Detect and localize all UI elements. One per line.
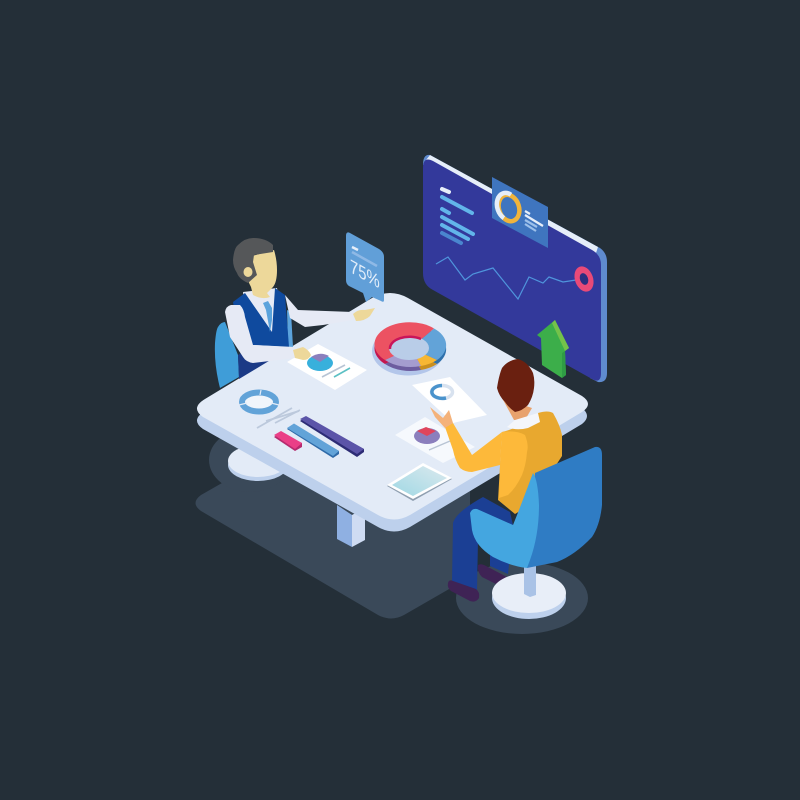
- far shoe: [478, 564, 507, 584]
- meeting table: [197, 293, 588, 532]
- right sleeve: [285, 295, 353, 327]
- tablet: [387, 463, 452, 501]
- left office chair: [215, 322, 239, 388]
- vest: [233, 288, 289, 347]
- screen face: [423, 160, 601, 381]
- left sleeve: [225, 305, 295, 363]
- screen frame edge: [423, 155, 607, 382]
- pie chart: [307, 355, 333, 371]
- table front leg: [337, 505, 365, 547]
- screen top highlight: [426, 155, 598, 253]
- donut hole: [389, 336, 429, 360]
- chart end marker ring: [571, 264, 597, 294]
- right hand: [353, 308, 375, 321]
- floor shadows: [196, 428, 588, 634]
- 75% callout bubble: [346, 232, 384, 302]
- hair: [233, 238, 273, 283]
- right man: [448, 497, 513, 602]
- yellow segment: [411, 348, 437, 366]
- table left pedestal base: [228, 445, 288, 481]
- right man torso: [430, 359, 562, 514]
- hair: [497, 359, 534, 412]
- screen line chart: [436, 257, 576, 299]
- shirt chest: [243, 288, 287, 352]
- screen text lines: [442, 189, 473, 243]
- orange shirt back: [498, 412, 562, 514]
- small donut: [432, 386, 452, 398]
- table bar: pink: [274, 431, 302, 451]
- ear: [244, 267, 252, 277]
- table bar: purple: [300, 416, 364, 457]
- vest trim: [287, 310, 293, 347]
- floating donut card: [492, 177, 548, 248]
- paper: left pie report: [287, 344, 367, 390]
- red segment: [374, 322, 434, 360]
- central donut chart: [372, 322, 446, 376]
- donut inner wall: [390, 337, 421, 349]
- tie: [263, 301, 272, 332]
- donut plate: [372, 326, 444, 376]
- light shirt panel: [499, 431, 528, 498]
- report lines: [322, 365, 345, 377]
- neck: [502, 398, 532, 420]
- collar: [507, 413, 540, 429]
- paper: pie report: [395, 417, 475, 463]
- chair back: [527, 447, 602, 568]
- left hand: [293, 347, 311, 360]
- report lines: [429, 441, 450, 450]
- table text lines: [257, 408, 300, 428]
- near shoe: [448, 580, 479, 602]
- blue segment: [411, 328, 446, 360]
- hand: [430, 407, 453, 428]
- paper: right donut report: [412, 377, 487, 423]
- neck and face: [247, 250, 277, 298]
- card donut: [493, 190, 523, 224]
- right office chair: [470, 447, 602, 568]
- table top: [197, 293, 588, 520]
- purple segment: [385, 348, 421, 367]
- 75% label: 75%: [350, 255, 380, 293]
- pie chart: [414, 428, 440, 444]
- right chair stem and base: [492, 566, 566, 619]
- bubble header lines: [352, 247, 358, 250]
- green up arrow: [537, 320, 569, 378]
- card lines: [525, 211, 543, 231]
- chair seat: [470, 473, 539, 568]
- near leg: [452, 497, 513, 590]
- table donut chart: [239, 390, 279, 412]
- lower vest: [238, 345, 292, 379]
- arm: [445, 423, 502, 472]
- table side: [197, 305, 587, 532]
- wall screen: [423, 155, 607, 382]
- table bar: blue: [287, 424, 339, 458]
- far leg: [490, 550, 510, 574]
- donut depth: [374, 326, 446, 371]
- left man: [225, 238, 375, 379]
